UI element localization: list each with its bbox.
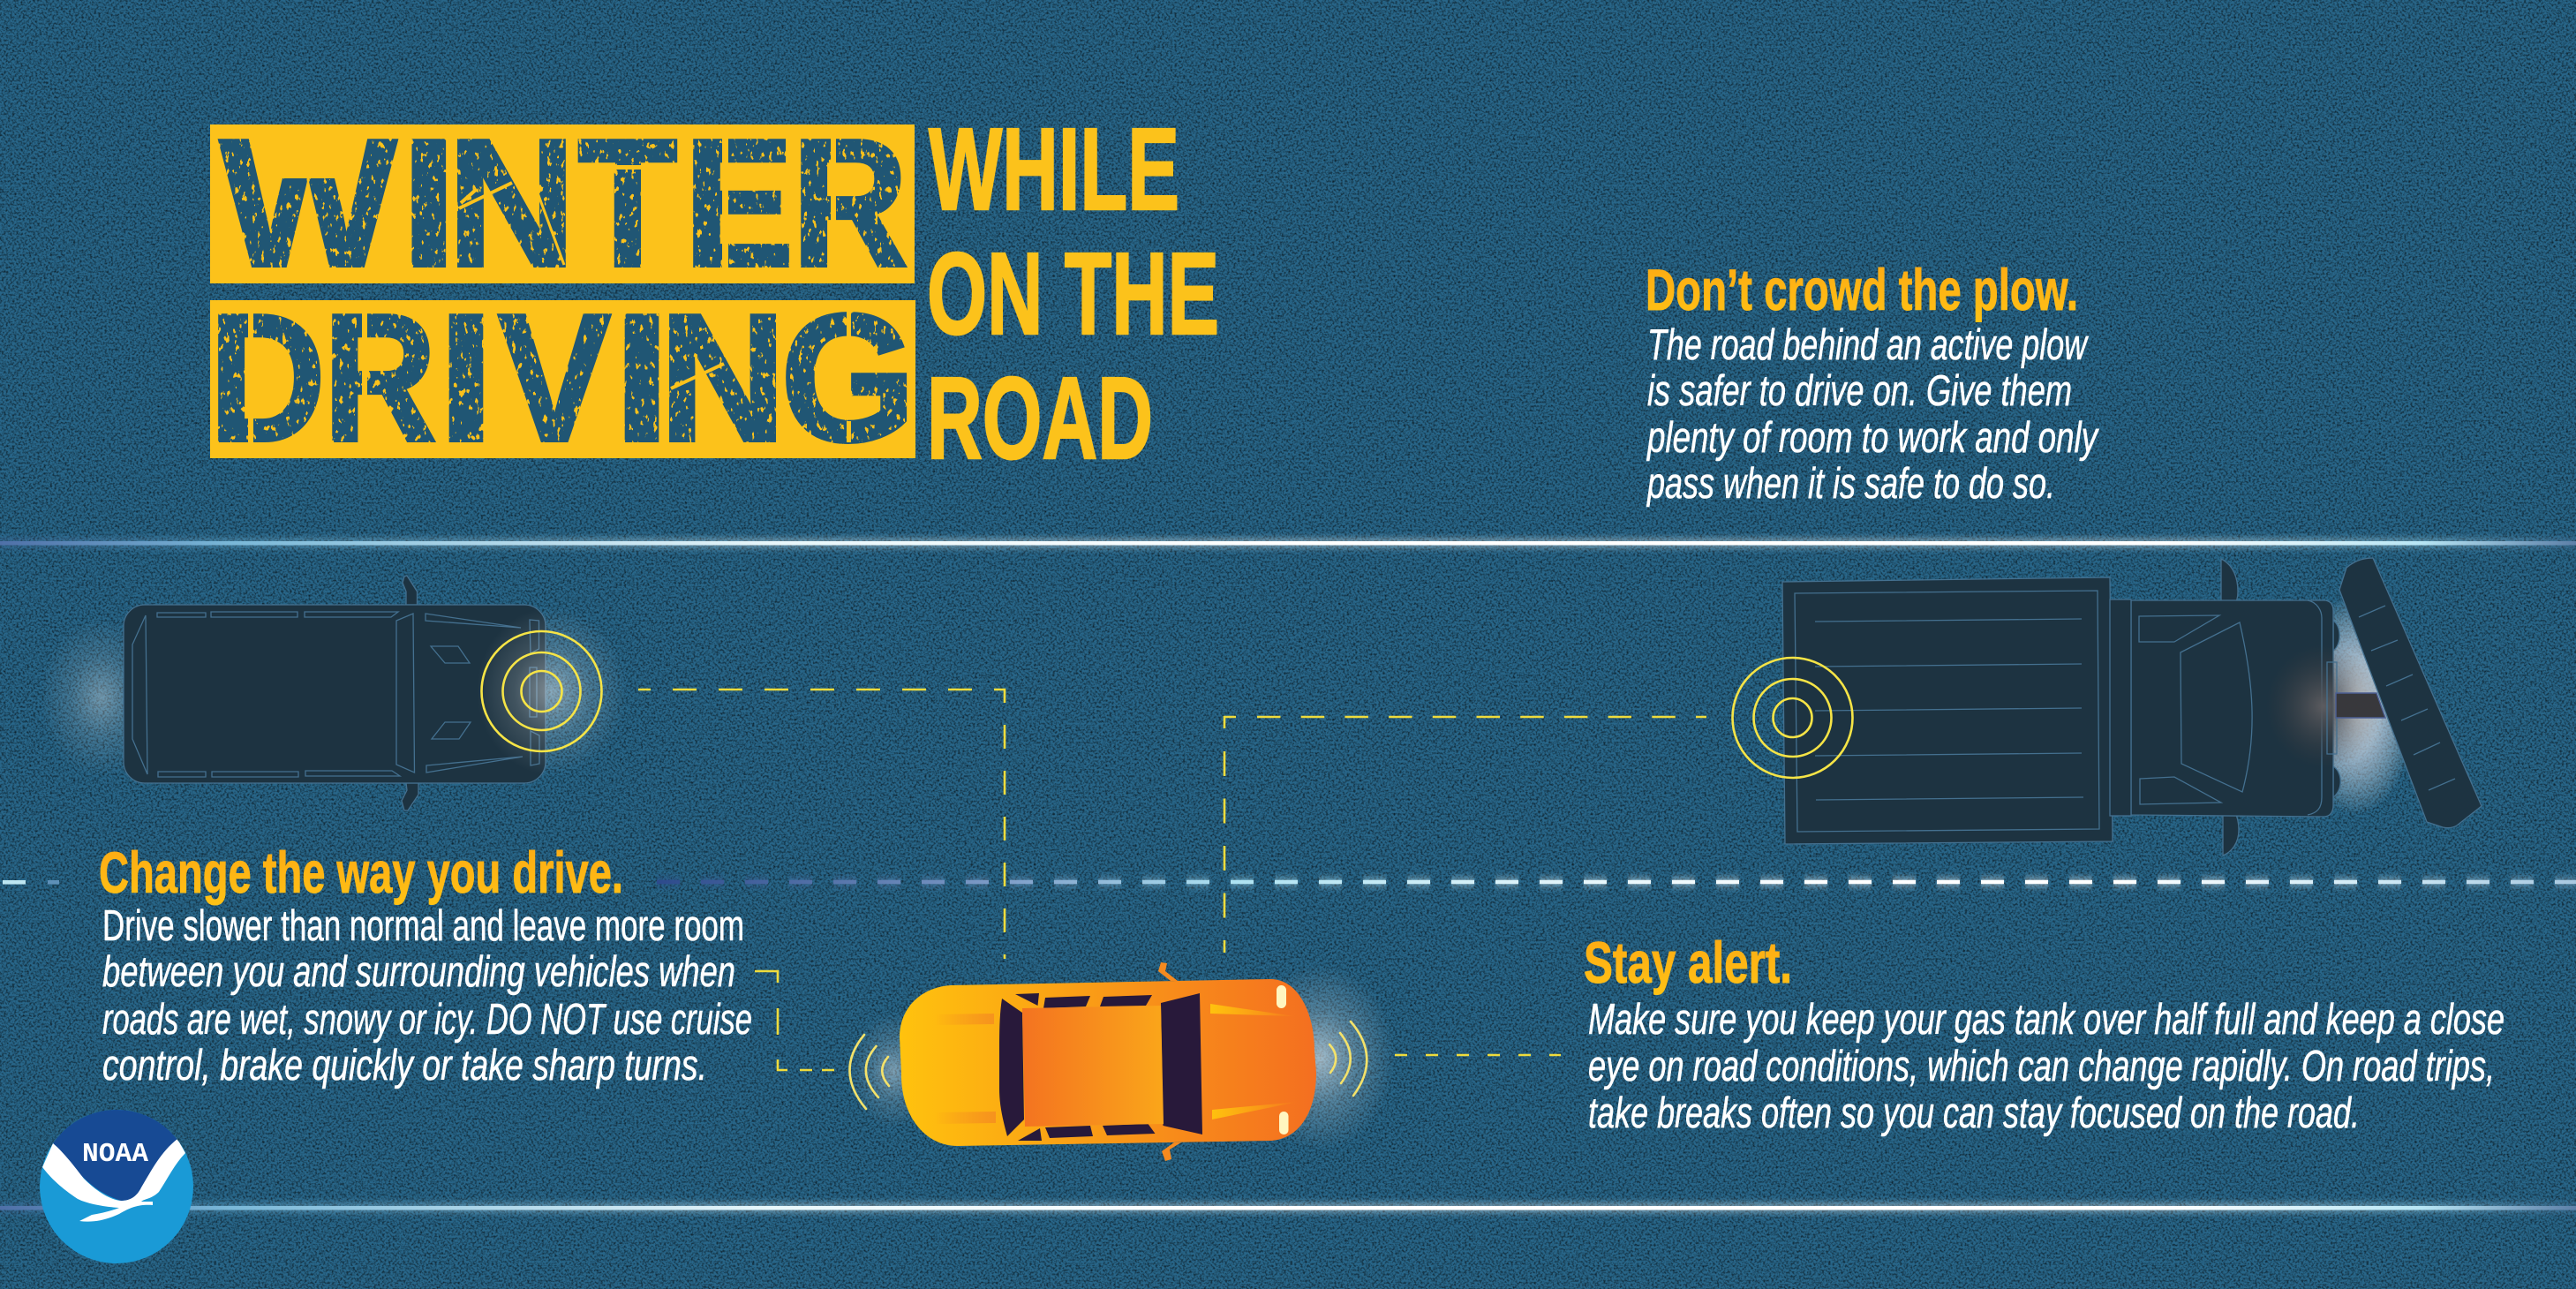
- text block: don't crowd the plow: The road behind an active plow: [1647, 321, 2090, 369]
- plow cab: [2131, 600, 2333, 817]
- WHILE ON THE ROAD title: [927, 104, 1219, 483]
- DRIVING stencil banner: I: [437, 276, 495, 479]
- WINTER stencil banner: W: [220, 102, 397, 305]
- plow trailer: [1782, 577, 2113, 844]
- plow blade: [2339, 558, 2482, 828]
- car streaks: [935, 1014, 996, 1124]
- plow truck: [1732, 558, 2482, 856]
- rear truck: [40, 576, 627, 810]
- NOAA logo: [40, 1110, 193, 1263]
- truck detail lines: [132, 612, 539, 777]
- text block: don't crowd the plow: is safer to drive on. Give them: [1647, 367, 2072, 415]
- text block: change the way you drive: Drive slower than normal and leave more room: [102, 902, 744, 950]
- WHILE ON THE ROAD title: ON THE: [927, 229, 1219, 358]
- car windows: [999, 993, 1202, 1141]
- target rings on truck: [482, 631, 602, 751]
- plow light glow: [2294, 594, 2417, 815]
- title block: [209, 102, 1219, 483]
- text block: change the way you drive: [99, 840, 752, 1089]
- DRIVING stencil banner: I: [613, 276, 671, 479]
- plow cab glow: [2266, 644, 2381, 768]
- WHILE ON THE ROAD title: ROAD: [927, 353, 1153, 483]
- orange car: [849, 962, 1395, 1161]
- road markings: [0, 539, 2576, 1212]
- plow cab windows: [2139, 615, 2337, 804]
- text block: change the way you drive: roads are wet, snowy or icy. DO NOT use cruise: [102, 996, 752, 1044]
- logo wordmark: NOAA: [82, 1139, 148, 1170]
- text block: don't crowd the plow: plenty of room to work and only: [1646, 414, 2099, 462]
- text block: change the way you drive: Change the way you drive.: [99, 840, 623, 905]
- truck body: [124, 605, 546, 783]
- top road edge line: [0, 539, 2576, 547]
- blade ticks: [2359, 606, 2455, 790]
- trailer coupling: [2110, 599, 2131, 816]
- text block: don't crowd the plow: pass when it is safe to do so.: [1646, 460, 2055, 508]
- text block: don't crowd the plow: Don’t crowd the plow.: [1646, 257, 2078, 322]
- plow mirrors: [2221, 559, 2239, 856]
- WINTER stencil banner: [210, 102, 915, 305]
- DRIVING stencil banner: [209, 276, 915, 479]
- plow arm: [2336, 693, 2385, 718]
- car roof: [1022, 1006, 1164, 1127]
- logo white bird: [42, 1139, 185, 1222]
- connector: car to alert text: [1395, 1054, 1561, 1056]
- plow bumps: [2333, 621, 2340, 797]
- dashed connectors: [638, 690, 1706, 1070]
- WHILE ON THE ROAD title: WHILE: [929, 104, 1179, 234]
- text block: stay alert: Stay alert.: [1584, 930, 1792, 995]
- text block: stay alert: [1584, 930, 2504, 1137]
- truck headlight glow: [477, 607, 627, 775]
- truck rear glow: [40, 618, 163, 777]
- text block: change the way you drive: control, brake quickly or take sharp turns.: [102, 1042, 707, 1089]
- DRIVING stencil banner: G: [780, 276, 915, 479]
- text block: don't crowd the plow: [1646, 257, 2099, 508]
- DRIVING stencil banner: N: [659, 276, 786, 479]
- WINTER stencil banner: R: [792, 102, 908, 305]
- trailer detail lines: [1795, 591, 2099, 832]
- target rings on plow: [1732, 658, 1852, 778]
- connector: rear truck to car: [638, 690, 1005, 959]
- text block: change the way you drive: between you and surrounding vehicles when: [102, 948, 735, 996]
- DRIVING stencil banner: D: [209, 276, 326, 479]
- DRIVING stencil banner: V: [498, 276, 611, 479]
- car rear glow: [849, 1014, 938, 1128]
- WINTER stencil banner: E: [683, 102, 794, 305]
- connector: plow truck to car: [1224, 717, 1706, 953]
- signal arcs front: [1329, 1021, 1367, 1096]
- WINTER stencil banner: N: [447, 102, 576, 305]
- logo dark upper field: [53, 1110, 177, 1201]
- car headlight glow: [1245, 965, 1395, 1150]
- DRIVING stencil banner: R: [323, 276, 437, 479]
- car mirrors: [1158, 962, 1181, 1161]
- connector: car to drive text: [755, 971, 834, 1070]
- signal arcs rear: [849, 1035, 889, 1109]
- WINTER stencil banner: I: [400, 102, 458, 305]
- WINTER stencil banner: T: [577, 102, 677, 305]
- center dashed lane line: [3, 880, 2576, 885]
- bottom road edge line: [0, 1203, 2576, 1212]
- car body: [900, 979, 1316, 1146]
- truck mirrors: [402, 576, 418, 810]
- car headlights: [1277, 985, 1289, 1134]
